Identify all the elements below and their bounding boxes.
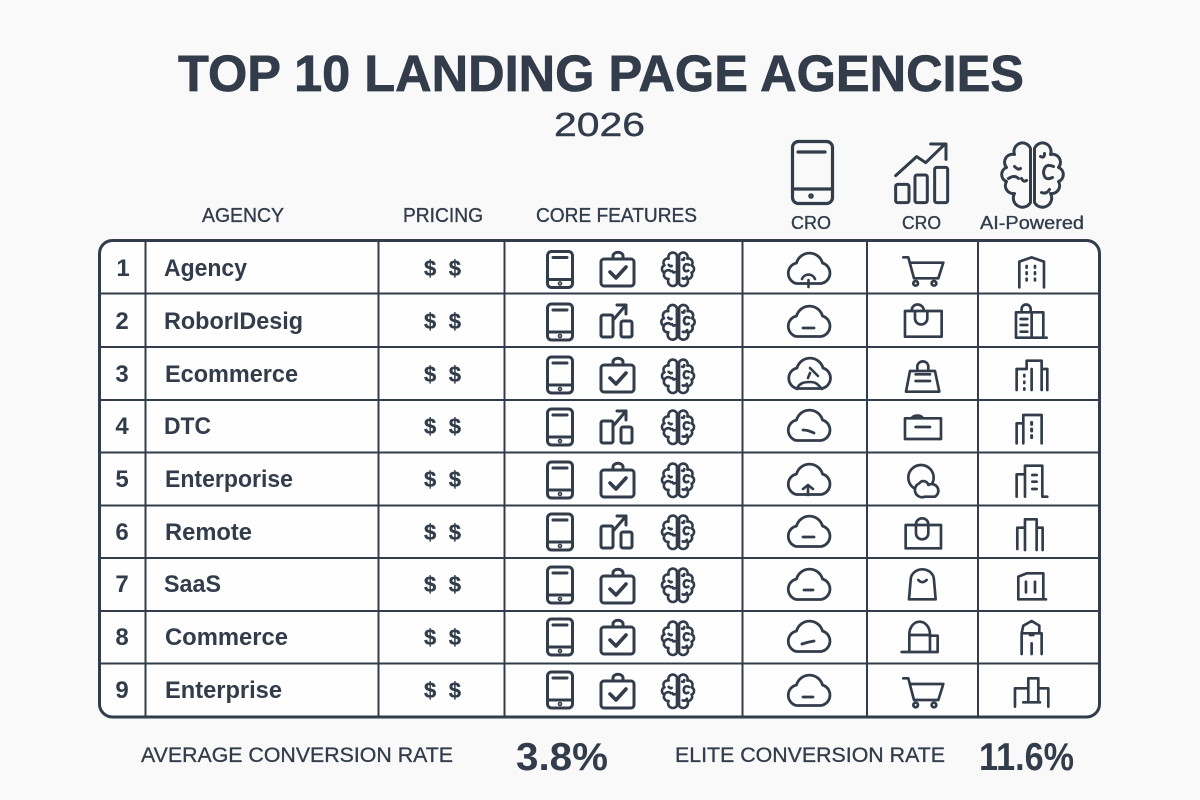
icon: cloud xyxy=(788,306,830,336)
footer stats xyxy=(141,736,1074,779)
agency name: Commerce xyxy=(165,624,288,651)
pricing: $ $ xyxy=(424,467,461,492)
icon: cloud upload xyxy=(788,253,830,287)
icon: growth chart xyxy=(896,144,948,203)
rank 9: 9 xyxy=(115,677,129,704)
agency name: Enterporise xyxy=(165,466,293,493)
icon: briefcase check xyxy=(601,620,634,654)
agency name: Ecommerce xyxy=(165,361,298,388)
row 7 xyxy=(115,567,1046,603)
icon: brain xyxy=(662,569,694,602)
icon: shopping cart xyxy=(903,678,943,707)
rank 4: 4 xyxy=(115,413,129,440)
ranking table xyxy=(100,240,1100,717)
icon: large brain xyxy=(1002,143,1063,207)
row 9 xyxy=(115,672,1048,708)
value: average: 3.8% xyxy=(516,736,608,779)
title: TOP 10 LANDING PAGE AGENCIES xyxy=(178,45,1024,102)
icon: briefcase check xyxy=(601,252,634,286)
row 5 xyxy=(115,462,1047,498)
icon: plaza building xyxy=(1015,678,1048,707)
icon: phone xyxy=(548,514,572,550)
icon: cloud xyxy=(788,516,830,546)
icon: tower xyxy=(1017,415,1042,443)
pricing: $ $ xyxy=(424,414,461,439)
icon: phone xyxy=(548,462,572,498)
value: elite: 11.6% xyxy=(979,736,1074,779)
icon: city blocks xyxy=(1017,361,1047,390)
agency name: Agency xyxy=(164,255,248,282)
pricing: $ $ xyxy=(424,256,461,281)
pricing: $ $ xyxy=(424,362,461,387)
heading: pricing: PRICING xyxy=(403,205,483,227)
icon: building xyxy=(1019,257,1044,287)
icon: cloud xyxy=(788,621,830,652)
rank 8: 8 xyxy=(115,624,129,651)
icon: phone xyxy=(548,409,572,445)
icon: briefcase check xyxy=(601,569,634,603)
row 8 xyxy=(115,619,1042,655)
icon: phone xyxy=(548,357,572,393)
pricing: $ $ xyxy=(424,625,461,650)
rank 7: 7 xyxy=(115,571,129,598)
heading: CRO mobile: CRO xyxy=(791,213,831,233)
icon: brain xyxy=(661,305,695,340)
subtitle: year: 2026 xyxy=(554,106,645,143)
heading: AI-powered: AI-Powered xyxy=(980,213,1084,233)
icon: growth bars xyxy=(601,305,632,337)
icon: office tower xyxy=(1017,466,1047,497)
row 1 xyxy=(116,252,1044,288)
icon: briefcase check xyxy=(601,463,634,497)
heading: core features: CORE FEATURES xyxy=(536,205,697,227)
icon: skyline xyxy=(1017,519,1043,550)
icon: tote bag xyxy=(906,361,939,392)
icon: brain xyxy=(662,411,694,444)
icon: shopping cart xyxy=(903,257,943,286)
rank 6: 6 xyxy=(115,519,129,546)
icon: storefront lock xyxy=(902,622,938,652)
icon: cloud with detail xyxy=(789,358,830,389)
heading: agency: AGENCY xyxy=(202,205,284,227)
icon: phone xyxy=(548,567,572,603)
icon: briefcase check xyxy=(601,358,634,392)
icon: circle tag xyxy=(908,465,938,497)
pricing: $ $ xyxy=(424,520,461,545)
icon: domed tower xyxy=(1022,621,1042,654)
rank 1: 1 xyxy=(116,255,130,282)
header row xyxy=(202,142,1084,233)
rank 2: 2 xyxy=(115,308,129,335)
icon: cloud xyxy=(788,569,830,600)
icon: shopping bag xyxy=(905,304,942,337)
agency name: Remote xyxy=(165,519,252,546)
pricing: $ $ xyxy=(424,678,461,703)
icon: growth bars xyxy=(601,411,632,443)
heading: CRO growth: CRO xyxy=(902,213,941,233)
icon: numbered building xyxy=(1018,573,1046,599)
icon: folder xyxy=(905,416,941,439)
rank 5: 5 xyxy=(115,466,129,493)
agency name: RoborIDesig xyxy=(164,308,303,335)
icon: growth bars xyxy=(601,516,632,548)
icon: phone xyxy=(548,672,572,708)
row 3 xyxy=(115,357,1047,393)
rank 3: 3 xyxy=(115,361,129,388)
icon: cloud xyxy=(788,410,830,440)
icon: arched bag xyxy=(909,569,936,599)
icon: cloud upload xyxy=(788,464,830,495)
icon: brain xyxy=(662,675,694,708)
agency name: SaaS xyxy=(164,571,221,598)
icon: phone xyxy=(548,304,572,340)
icon: brain xyxy=(662,464,694,497)
pricing: $ $ xyxy=(424,309,461,334)
icon: brain xyxy=(662,516,694,549)
label: elite conversion rate: ELITE CONVERSION RATE xyxy=(675,744,945,767)
icon: phone xyxy=(548,619,572,655)
row 2 xyxy=(115,304,1047,340)
row 4 xyxy=(115,409,1042,445)
table frame xyxy=(100,240,1100,717)
agency name: Enterprise xyxy=(165,677,282,704)
icon: office block xyxy=(1016,304,1047,338)
icon: cloud xyxy=(788,675,830,706)
agency name: DTC xyxy=(164,413,211,440)
icon: brain xyxy=(662,622,694,655)
pricing: $ $ xyxy=(424,572,461,597)
row 6 xyxy=(115,514,1043,550)
icon: padlock bag xyxy=(906,518,941,548)
icon: briefcase check xyxy=(601,674,634,708)
icon: brain xyxy=(662,253,694,286)
icon: phone xyxy=(548,252,572,288)
label: average conversion rate: AVERAGE CONVERSION RATE xyxy=(141,744,453,767)
icon: large phone xyxy=(792,142,832,204)
icon: brain xyxy=(662,360,694,393)
